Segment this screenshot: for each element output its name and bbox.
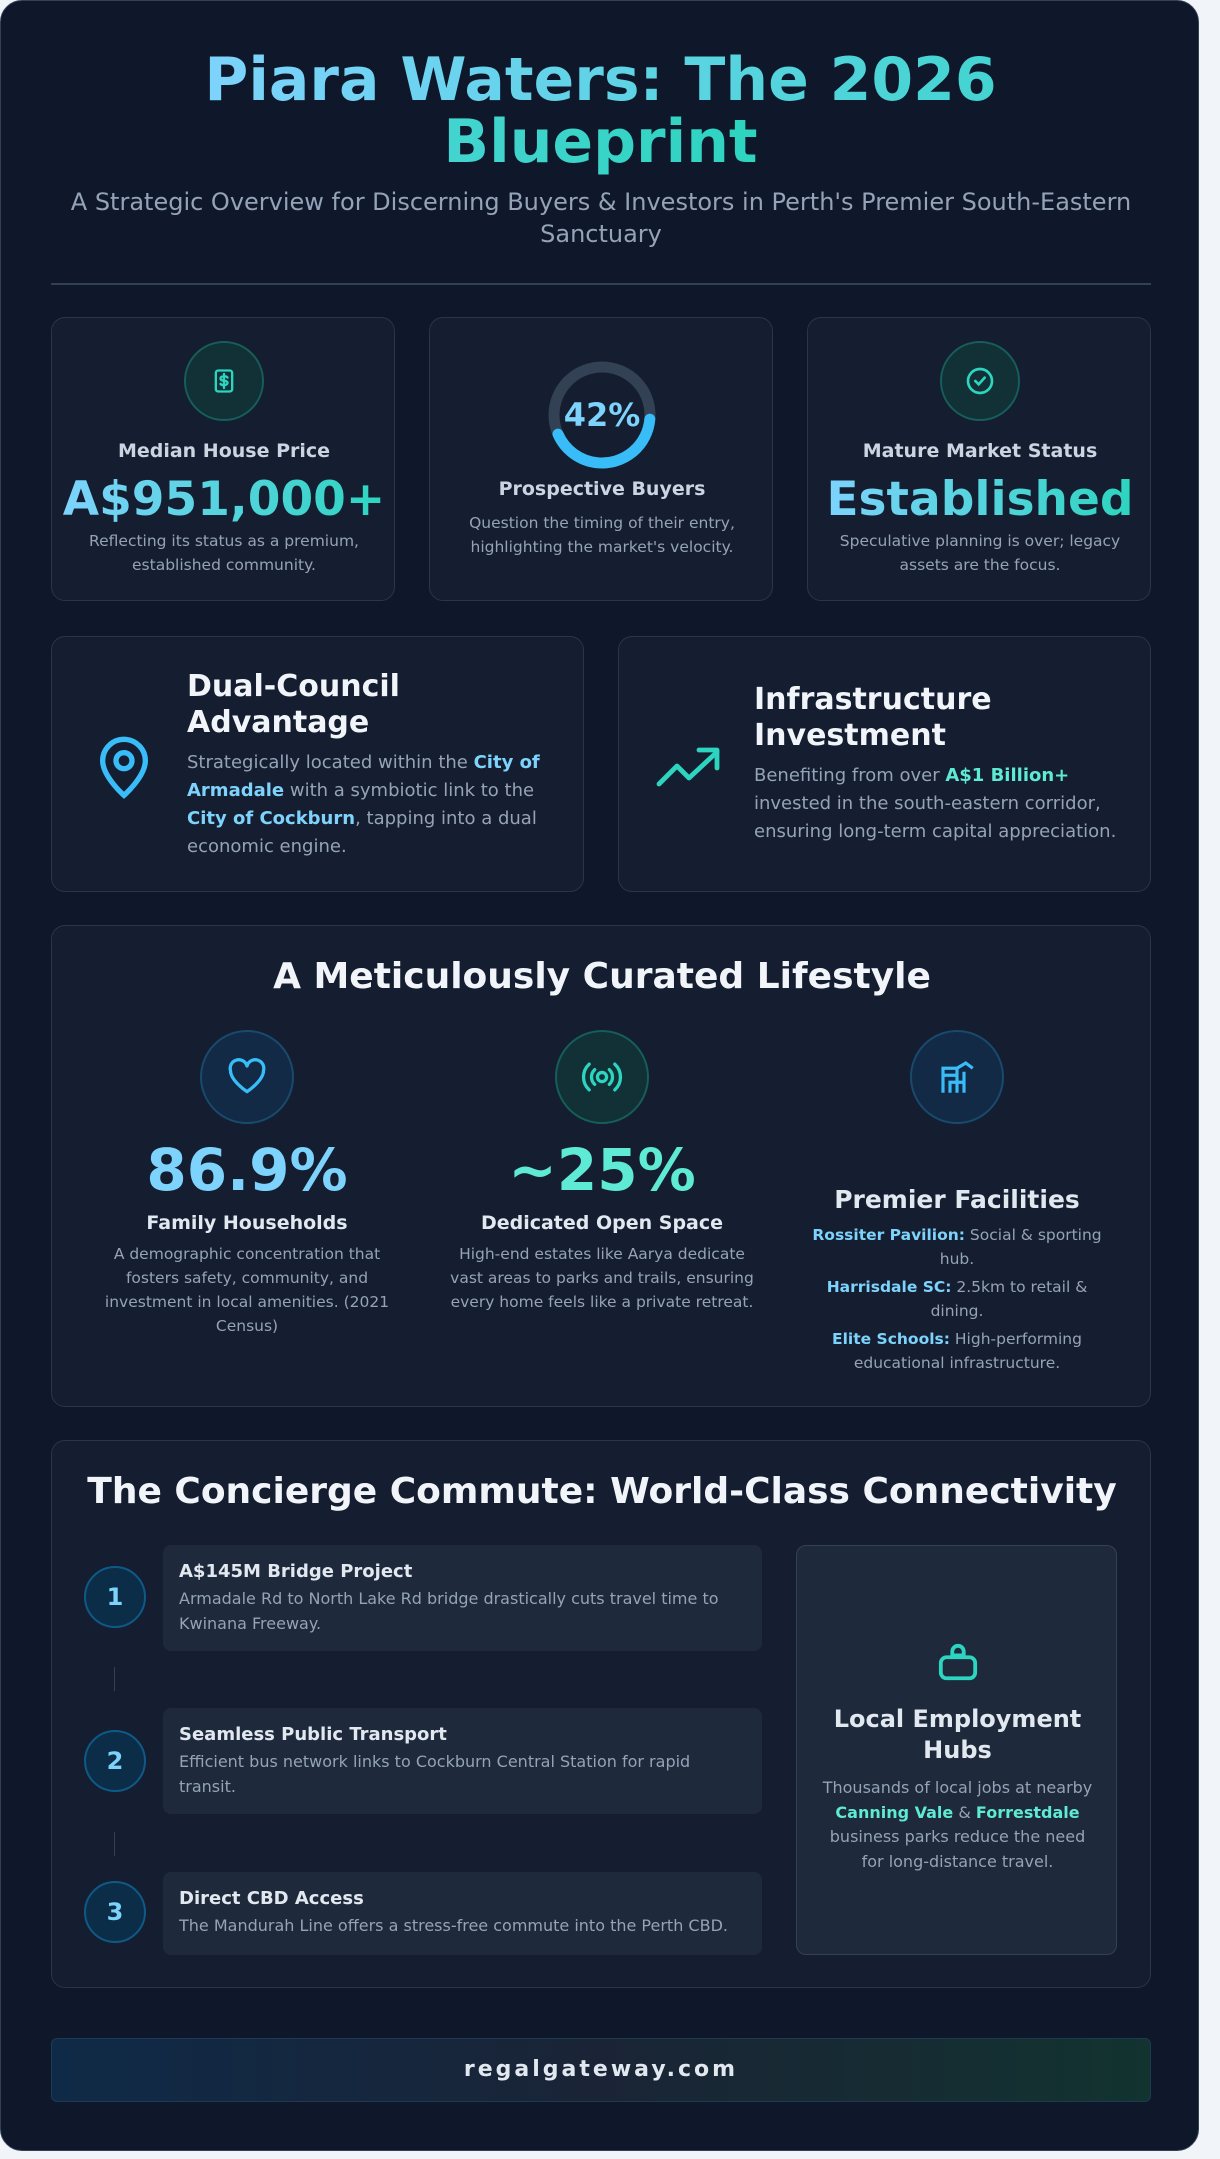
card: local employment bbox=[796, 1545, 1117, 1955]
description: High-end estates like Aarya dedicate vast areas to parks and trails, ensuring every home feels like a private retreat. bbox=[450, 1245, 754, 1311]
list: Harrisdale SC: 2.5km to retail & dining. bbox=[827, 1278, 1087, 1320]
title: Piara Waters: The 2026 bbox=[204, 45, 997, 115]
column: facilities bbox=[812, 1030, 1102, 1372]
step 2 bbox=[84, 1708, 762, 1814]
heading bbox=[187, 669, 400, 740]
label: Mature Market Status bbox=[863, 440, 1097, 462]
card: mature market bbox=[807, 317, 1151, 601]
body: Thousands of local jobs at nearby Canning Vale & Forrestdale business parks reduce the need for long-distance travel. bbox=[823, 1778, 1092, 1870]
value: A$951,000+ bbox=[63, 472, 385, 527]
title: Blueprint bbox=[443, 107, 758, 177]
step 3: The Mandurah Line offers a stress-free commute into the Perth CBD. bbox=[179, 1916, 728, 1935]
icon: briefcase bbox=[938, 1644, 978, 1680]
card: dual council bbox=[51, 636, 584, 892]
step 1: Armadale Rd to North Lake Rd bridge drastically cuts travel time to Kwinana Freeway. bbox=[179, 1589, 719, 1633]
icon: broadcast bbox=[555, 1030, 649, 1124]
step 2: 2 bbox=[107, 1747, 123, 1775]
panel: commute bbox=[51, 1440, 1151, 1988]
value: Established bbox=[826, 472, 1134, 527]
card: prospective buyers bbox=[429, 317, 773, 601]
step 1 bbox=[84, 1545, 762, 1651]
description: A demographic concentration that fosters safety, community, and investment in local amenities. (2021 Census) bbox=[105, 1245, 389, 1335]
label: Family Households bbox=[146, 1212, 348, 1234]
card: infrastructure bbox=[618, 636, 1151, 892]
description: Speculative planning is over; legacy assets are the focus. bbox=[840, 532, 1120, 574]
heading: Dual-Council bbox=[187, 669, 400, 704]
icon: trend bbox=[656, 748, 720, 786]
stat: ~25% bbox=[508, 1136, 696, 1204]
icon: building bbox=[910, 1030, 1004, 1124]
step 3: Direct CBD Access bbox=[179, 1888, 364, 1909]
heading: The Concierge Commute: World-Class Connectivity bbox=[87, 1471, 1117, 1512]
body: Strategically located within the City of Armadale with a symbiotic link to the City of Cockburn, tapping into a dual economic engine. bbox=[187, 752, 540, 857]
heading: A Meticulously Curated Lifestyle bbox=[273, 956, 931, 997]
heading: Infrastructure bbox=[754, 682, 992, 717]
icon: dollar bbox=[184, 341, 264, 421]
ring chart 42% bbox=[548, 362, 656, 468]
stat: 86.9% bbox=[146, 1136, 348, 1204]
card: median house price bbox=[51, 317, 395, 601]
column: open space bbox=[450, 1030, 754, 1311]
column: family bbox=[105, 1030, 389, 1335]
heading: Hubs bbox=[923, 1736, 992, 1764]
label: Dedicated Open Space bbox=[481, 1212, 723, 1234]
footer: regalgateway.com bbox=[464, 2057, 738, 2082]
panel: lifestyle bbox=[51, 925, 1151, 1407]
list bbox=[812, 1226, 1102, 1372]
step 3 bbox=[84, 1872, 762, 1955]
body: Benefiting from over A$1 Billion+ invested in the south-eastern corridor, ensuring long-term capital appreciation. bbox=[754, 765, 1116, 842]
title bbox=[204, 45, 997, 177]
list: Elite Schools: High-performing educational infrastructure. bbox=[832, 1330, 1082, 1372]
step 3: 3 bbox=[107, 1898, 123, 1926]
icon: check bbox=[940, 341, 1020, 421]
footer bbox=[51, 2038, 1151, 2102]
heading: Premier Facilities bbox=[834, 1185, 1080, 1214]
ring chart 42%: 42% bbox=[564, 396, 640, 434]
list: Rossiter Pavilion: Social & sporting hub. bbox=[812, 1226, 1102, 1268]
icon: map pin bbox=[100, 736, 148, 799]
step 2: Efficient bus network links to Cockburn Central Station for rapid transit. bbox=[179, 1752, 690, 1796]
heading: Investment bbox=[754, 718, 946, 753]
subtitle: A Strategic Overview for Discerning Buyers & Investors in Perth's Premier South-Eastern Sanctuary bbox=[71, 188, 1131, 248]
description: Question the timing of their entry, highlighting the market's velocity. bbox=[469, 514, 735, 556]
heading: Advantage bbox=[187, 705, 369, 740]
step 1: 1 bbox=[107, 1583, 123, 1611]
heading bbox=[754, 682, 992, 753]
heading: Local Employment bbox=[834, 1705, 1081, 1733]
label: Prospective Buyers bbox=[499, 478, 705, 500]
step 1: A$145M Bridge Project bbox=[179, 1561, 412, 1582]
step 2: Seamless Public Transport bbox=[179, 1724, 447, 1745]
heading bbox=[834, 1705, 1081, 1764]
label: Median House Price bbox=[118, 440, 330, 462]
icon: heart bbox=[200, 1030, 294, 1124]
description: Reflecting its status as a premium, established community. bbox=[89, 532, 359, 574]
